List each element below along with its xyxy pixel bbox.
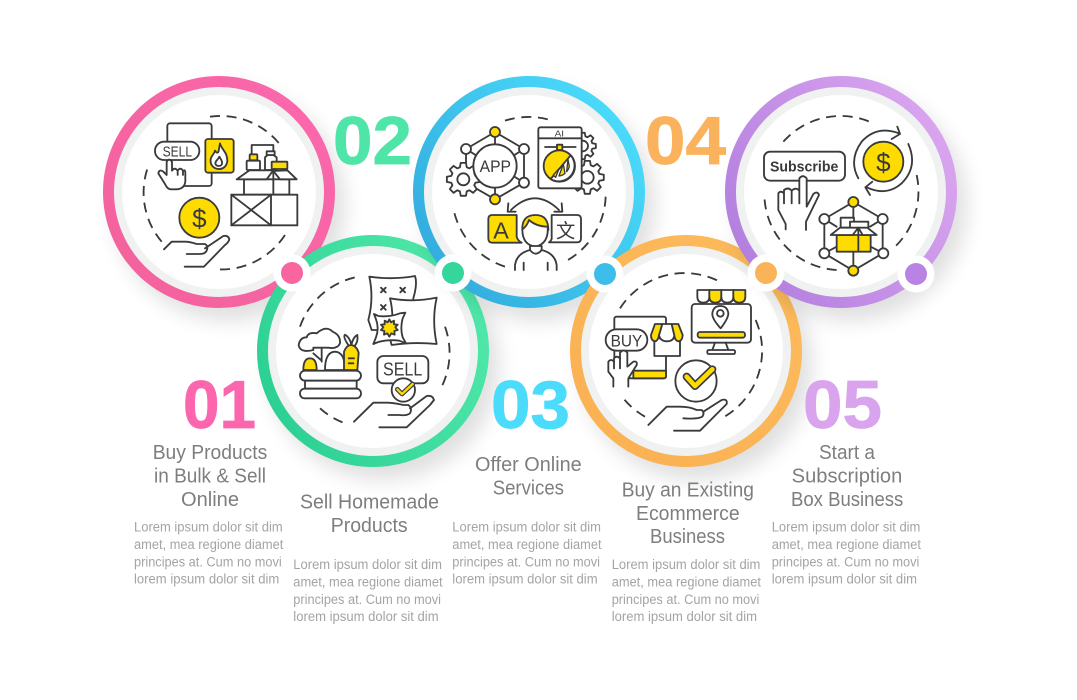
text block: step 3: lorem ipsum dolor sit dim: [452, 572, 598, 586]
heading: step 1: Buy Products: [153, 442, 267, 464]
panel: step 1 circle: [108, 82, 345, 321]
text block: step 2: amet, mea regione diamet: [293, 574, 443, 590]
icon: online services: A: [493, 217, 509, 243]
text block: step 5: Lorem ipsum dolor sit dim: [772, 520, 920, 534]
marker dot: step 1: [274, 254, 310, 292]
heading: step 4: Business: [650, 526, 725, 548]
marker dot: step 5: [898, 256, 934, 292]
marker dot: step 3: [586, 256, 624, 292]
heading: step 3: Services: [493, 478, 564, 500]
icon: bulk selling: $: [192, 203, 207, 233]
text block: step 1: lorem ipsum dolor sit dim: [134, 572, 279, 586]
heading: step 5: Start a: [819, 442, 876, 464]
icon: subscription box: [764, 116, 918, 276]
icon: subscription box: $: [876, 148, 891, 178]
heading: step 3: Offer Online: [475, 454, 582, 476]
heading: step 1: Online: [181, 489, 239, 511]
heading: step 4: Ecommerce: [636, 503, 740, 525]
heading: step 5: [791, 442, 903, 511]
heading: step 1: in Bulk & Sell: [154, 466, 266, 488]
icon: subscription box: Subscribe: [770, 160, 838, 176]
marker dot: step 4: [748, 254, 784, 292]
marker dot: step 2: [434, 254, 472, 292]
number 01: 01: [183, 367, 256, 443]
icon: existing ecommerce business: [606, 273, 762, 431]
heading: step 4: Buy an Existing: [622, 480, 754, 502]
text block: step 2: [293, 557, 443, 624]
text block: step 5: principes at. Cum no movi: [772, 554, 919, 569]
text block: step 4: principes at. Cum no movi: [612, 592, 759, 607]
text block: step 3: [452, 520, 602, 586]
text block: step 1: principes at. Cum no movi: [134, 554, 282, 569]
text block: step 5: amet, mea regione diamet: [772, 537, 921, 552]
number 04: 04: [645, 103, 726, 179]
icon: online services: APP: [480, 157, 511, 176]
number 02: 02: [333, 103, 412, 179]
panel: step 5 circle: [730, 82, 967, 321]
panel: step 2 circle: [262, 240, 499, 480]
text block: step 1: Lorem ipsum dolor sit dim: [134, 520, 283, 534]
icon: existing ecommerce business: BUY: [611, 331, 642, 350]
text block: step 2: lorem ipsum dolor sit dim: [293, 609, 439, 624]
icon: online services: [447, 117, 606, 270]
heading: step 1: [153, 442, 267, 511]
heading: step 5: Box Business: [791, 489, 903, 511]
text block: step 4: lorem ipsum dolor sit dim: [612, 609, 757, 624]
icon: bulk selling: [144, 116, 297, 269]
heading: step 5: Subscription: [792, 466, 902, 488]
text block: step 5: lorem ipsum dolor sit dim: [772, 572, 917, 586]
icon: online services: 文: [556, 216, 575, 244]
panel: step 3 circle: [418, 82, 655, 321]
text block: step 3: amet, mea regione diamet: [452, 537, 602, 552]
text block: step 4: [612, 557, 761, 624]
heading: step 2: [300, 492, 439, 537]
icon: online services: AI: [555, 129, 564, 139]
text block: step 4: Lorem ipsum dolor sit dim: [612, 557, 760, 572]
heading: step 2: Products: [331, 515, 408, 537]
icon: bulk selling: SELL: [163, 143, 192, 160]
text block: step 1: [134, 520, 284, 586]
number 03: 03: [491, 367, 570, 443]
number 05: 05: [803, 367, 882, 443]
text block: step 2: Lorem ipsum dolor sit dim: [293, 557, 442, 572]
heading: step 2: Sell Homemade: [300, 492, 439, 514]
text block: step 3: principes at. Cum no movi: [452, 554, 600, 569]
panel: step 4 circle: [576, 240, 812, 480]
text block: step 3: Lorem ipsum dolor sit dim: [452, 520, 601, 534]
icon: homemade products: SELL: [383, 359, 422, 380]
text block: step 4: amet, mea regione diamet: [612, 574, 761, 590]
text block: step 5: [772, 520, 921, 586]
text block: step 1: amet, mea regione diamet: [134, 537, 284, 552]
heading: step 3: [475, 454, 582, 500]
icon: homemade products: [299, 276, 450, 427]
text block: step 2: principes at. Cum no movi: [293, 592, 441, 607]
heading: step 4: [622, 480, 754, 548]
